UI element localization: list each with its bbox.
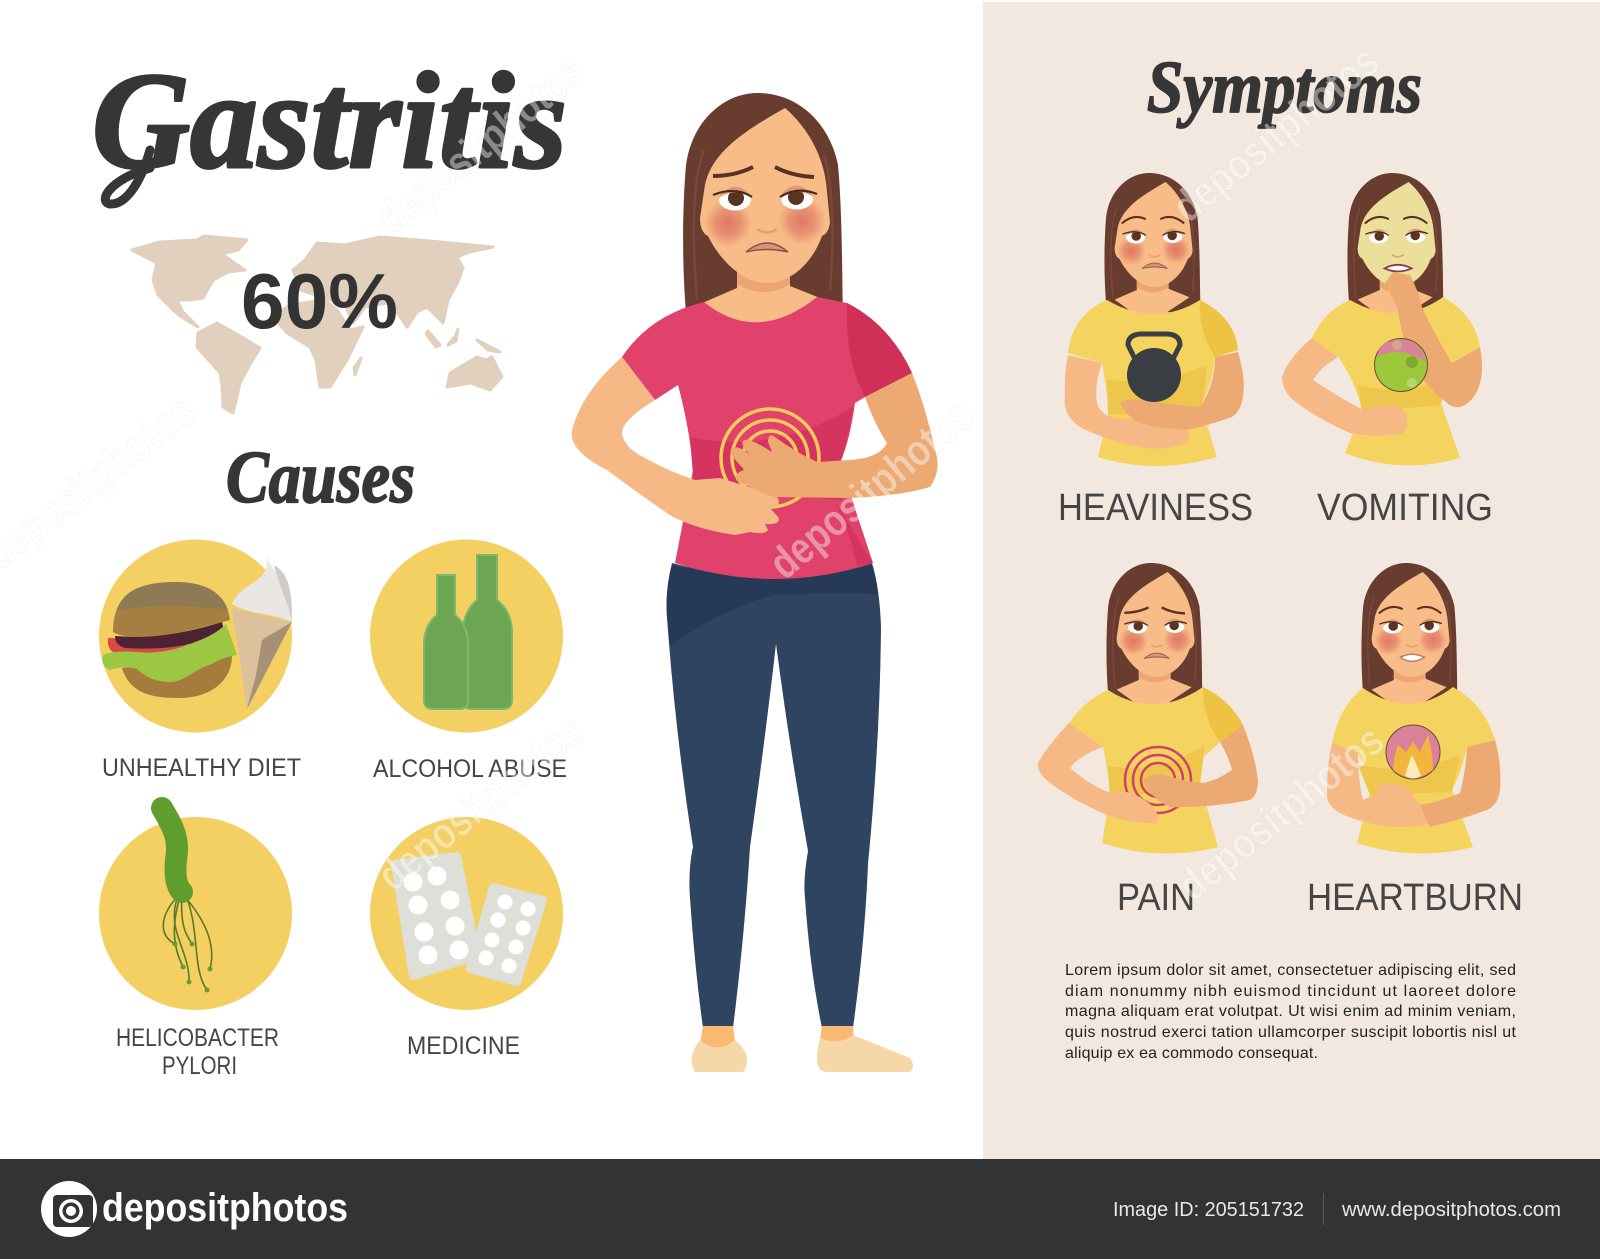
icon: pain rings	[1125, 747, 1191, 813]
label: helicobacter pylori	[116, 1024, 279, 1080]
right arm and hand	[731, 373, 938, 498]
icon: bottles	[424, 555, 512, 709]
stat: 60%: 60%	[241, 257, 398, 345]
label: helicobacter pylori: PYLORI	[162, 1052, 237, 1080]
footer url: www.depositphotos.com	[1341, 1199, 1561, 1221]
arms	[1065, 355, 1189, 449]
arms	[1038, 723, 1158, 823]
icon: blister packs	[395, 856, 543, 982]
body text	[1065, 962, 1517, 1062]
label: helicobacter pylori: HELICOBACTER	[116, 1024, 279, 1052]
label: pain: PAIN	[1117, 877, 1195, 919]
title: Gastritis	[92, 44, 567, 197]
head	[1104, 173, 1200, 324]
heading: causes: Causes	[226, 437, 415, 519]
watermarks	[0, 36, 1394, 911]
head	[683, 93, 843, 345]
watermarks: depositphotos	[1168, 715, 1394, 911]
cause: alcohol abuse	[370, 540, 563, 732]
icon: ice cream	[232, 556, 292, 709]
body text: magna aliquam erat volutpat. Ut wisi enim ad minim veniam,	[1065, 1003, 1516, 1020]
label: heaviness: HEAVINESS	[1058, 487, 1253, 529]
head	[1106, 563, 1202, 714]
footer logo icon	[41, 1181, 97, 1237]
yellow t-shirt	[1332, 687, 1495, 854]
label: unhealthy diet: UNHEALTHY DIET	[102, 754, 301, 782]
body text: aliquip ex ea commodo consequat.	[1065, 1045, 1318, 1062]
icon: burger	[102, 582, 237, 698]
arms	[1327, 743, 1448, 827]
t-shirt	[622, 297, 912, 579]
label: alcohol abuse: ALCOHOL ABUSE	[373, 755, 567, 783]
label: heartburn: HEARTBURN	[1307, 877, 1523, 919]
head	[1347, 173, 1443, 324]
label: medicine: MEDICINE	[407, 1032, 520, 1060]
panel: symptoms background	[983, 2, 1600, 1159]
head	[1361, 563, 1457, 714]
symptom: heaviness	[1065, 173, 1244, 466]
heading: symptoms: Symptoms	[1147, 47, 1422, 129]
symptom: pain	[1038, 563, 1258, 854]
yellow t-shirt	[1312, 297, 1480, 465]
left arm and hand	[572, 357, 779, 535]
label: vomiting: VOMITING	[1317, 487, 1493, 529]
feet	[691, 1026, 913, 1072]
footer image id: Image ID: 205151732	[1113, 1199, 1304, 1221]
icon: pain rings	[721, 409, 819, 507]
yellow t-shirt	[1068, 300, 1238, 466]
cause: unhealthy diet	[99, 540, 292, 732]
body text: Lorem ipsum dolor sit amet, consectetuer adipiscing elit, sed	[1065, 962, 1516, 979]
footer logo text: depositphotos	[102, 1186, 348, 1230]
cause: helicobacter pylori	[99, 808, 292, 1010]
footer bar	[0, 1159, 1600, 1259]
watermarks: depositphotos	[1163, 36, 1389, 232]
icon: bacterium	[162, 808, 212, 992]
icon: flames	[1386, 725, 1440, 779]
icon: kettlebell	[1127, 334, 1181, 402]
yellow t-shirt	[1069, 687, 1243, 854]
watermarks: depositphotos	[368, 705, 594, 901]
symptom: heartburn	[1327, 563, 1500, 854]
world map	[132, 236, 502, 413]
watermarks: depositphotos	[368, 47, 594, 243]
arms	[1282, 338, 1407, 436]
icon: stomach contents	[1374, 338, 1428, 392]
body text: diam nonummy nibh euismod tincidunt ut laoreet dolore	[1065, 983, 1516, 1000]
cause: medicine	[370, 817, 563, 1010]
trousers	[667, 563, 881, 1030]
body text: quis nostrud exerci tation ullamcorper suscipit lobortis nisl ut	[1065, 1024, 1517, 1041]
watermarks: depositphotos	[760, 390, 983, 589]
main figure: woman with stomach pain	[572, 93, 938, 1072]
symptom: vomiting	[1282, 173, 1482, 465]
